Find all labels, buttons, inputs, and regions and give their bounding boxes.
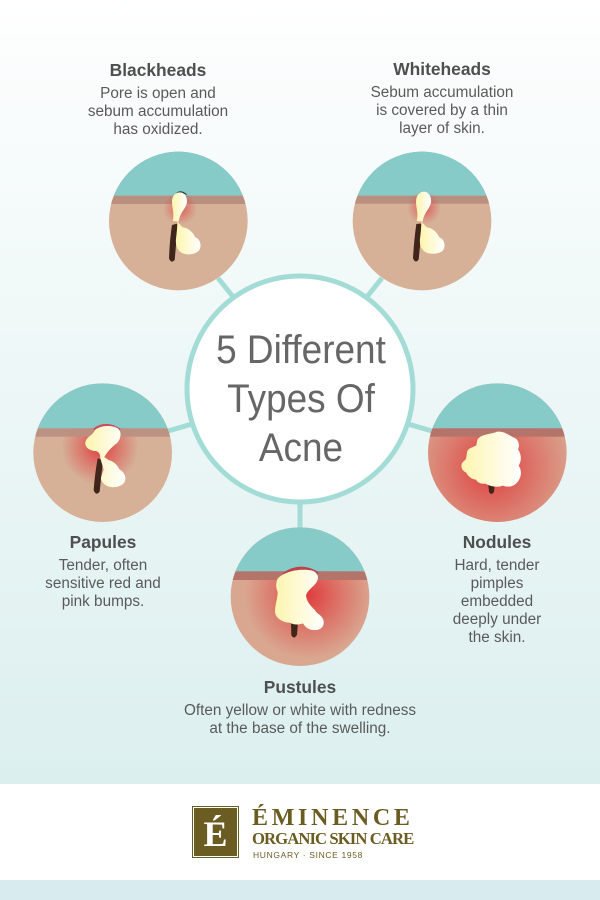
icon: blackhead cross-section [109, 152, 248, 290]
logo wordmark: HUNGARY · SINCE 1958 [253, 850, 363, 860]
text: whiteheads: Whiteheads [393, 59, 491, 79]
text: papules: Tender, often [59, 557, 147, 574]
text: papules: sensitive red and [45, 575, 161, 592]
text: whiteheads: layer of skin. [399, 120, 485, 137]
text: nodules: pimples [471, 575, 523, 592]
text: whiteheads: Sebum accumulation [371, 84, 513, 101]
title [216, 328, 386, 470]
text: pustules: Often yellow or white with redness [184, 702, 416, 719]
text: blackheads: sebum accumulation [88, 103, 228, 120]
logo wordmark: ORGANIC SKIN CARE [252, 829, 413, 848]
central hub circle [187, 276, 413, 502]
logo emblem: É [203, 814, 228, 854]
text: nodules: Hard, tender [454, 557, 540, 574]
logo emblem [192, 806, 239, 858]
footer band [0, 784, 600, 900]
icon: whitehead cross-section [352, 152, 492, 290]
text: pustules: Pustules [264, 677, 336, 697]
logo wordmark [252, 804, 414, 860]
diagram: connectors, hub and skin cross-sections [33, 152, 567, 666]
text: papules: pink bumps. [62, 593, 144, 610]
logo wordmark: ÉMINENCE [252, 805, 414, 831]
text: nodules: deeply under [453, 611, 541, 628]
text: nodules: embedded [461, 593, 533, 610]
text: whiteheads [371, 59, 513, 137]
text: blackheads: has oxidized. [113, 121, 203, 138]
title: 5 Different [216, 328, 386, 372]
text: nodules: Nodules [463, 532, 531, 552]
text: whiteheads: is covered by a thin [376, 102, 508, 119]
icon: papule cross-section [33, 383, 172, 522]
text: pustules: at the base of the swelling. [209, 720, 391, 737]
connectors [168, 278, 432, 530]
title: Acne [259, 426, 343, 470]
bottom strip [0, 880, 600, 900]
text: pustules [184, 677, 416, 737]
icon: nodule cross-section [428, 383, 567, 522]
text: nodules [453, 532, 541, 646]
text: blackheads: Pore is open and [100, 85, 216, 102]
text: nodules: the skin. [469, 629, 525, 646]
title: Types Of [227, 377, 375, 421]
text: blackheads [88, 60, 228, 138]
text: papules: Papules [70, 532, 136, 552]
text: blackheads: Blackheads [110, 60, 206, 80]
icon: pustule cross-section [230, 527, 370, 666]
text: papules [45, 532, 161, 610]
